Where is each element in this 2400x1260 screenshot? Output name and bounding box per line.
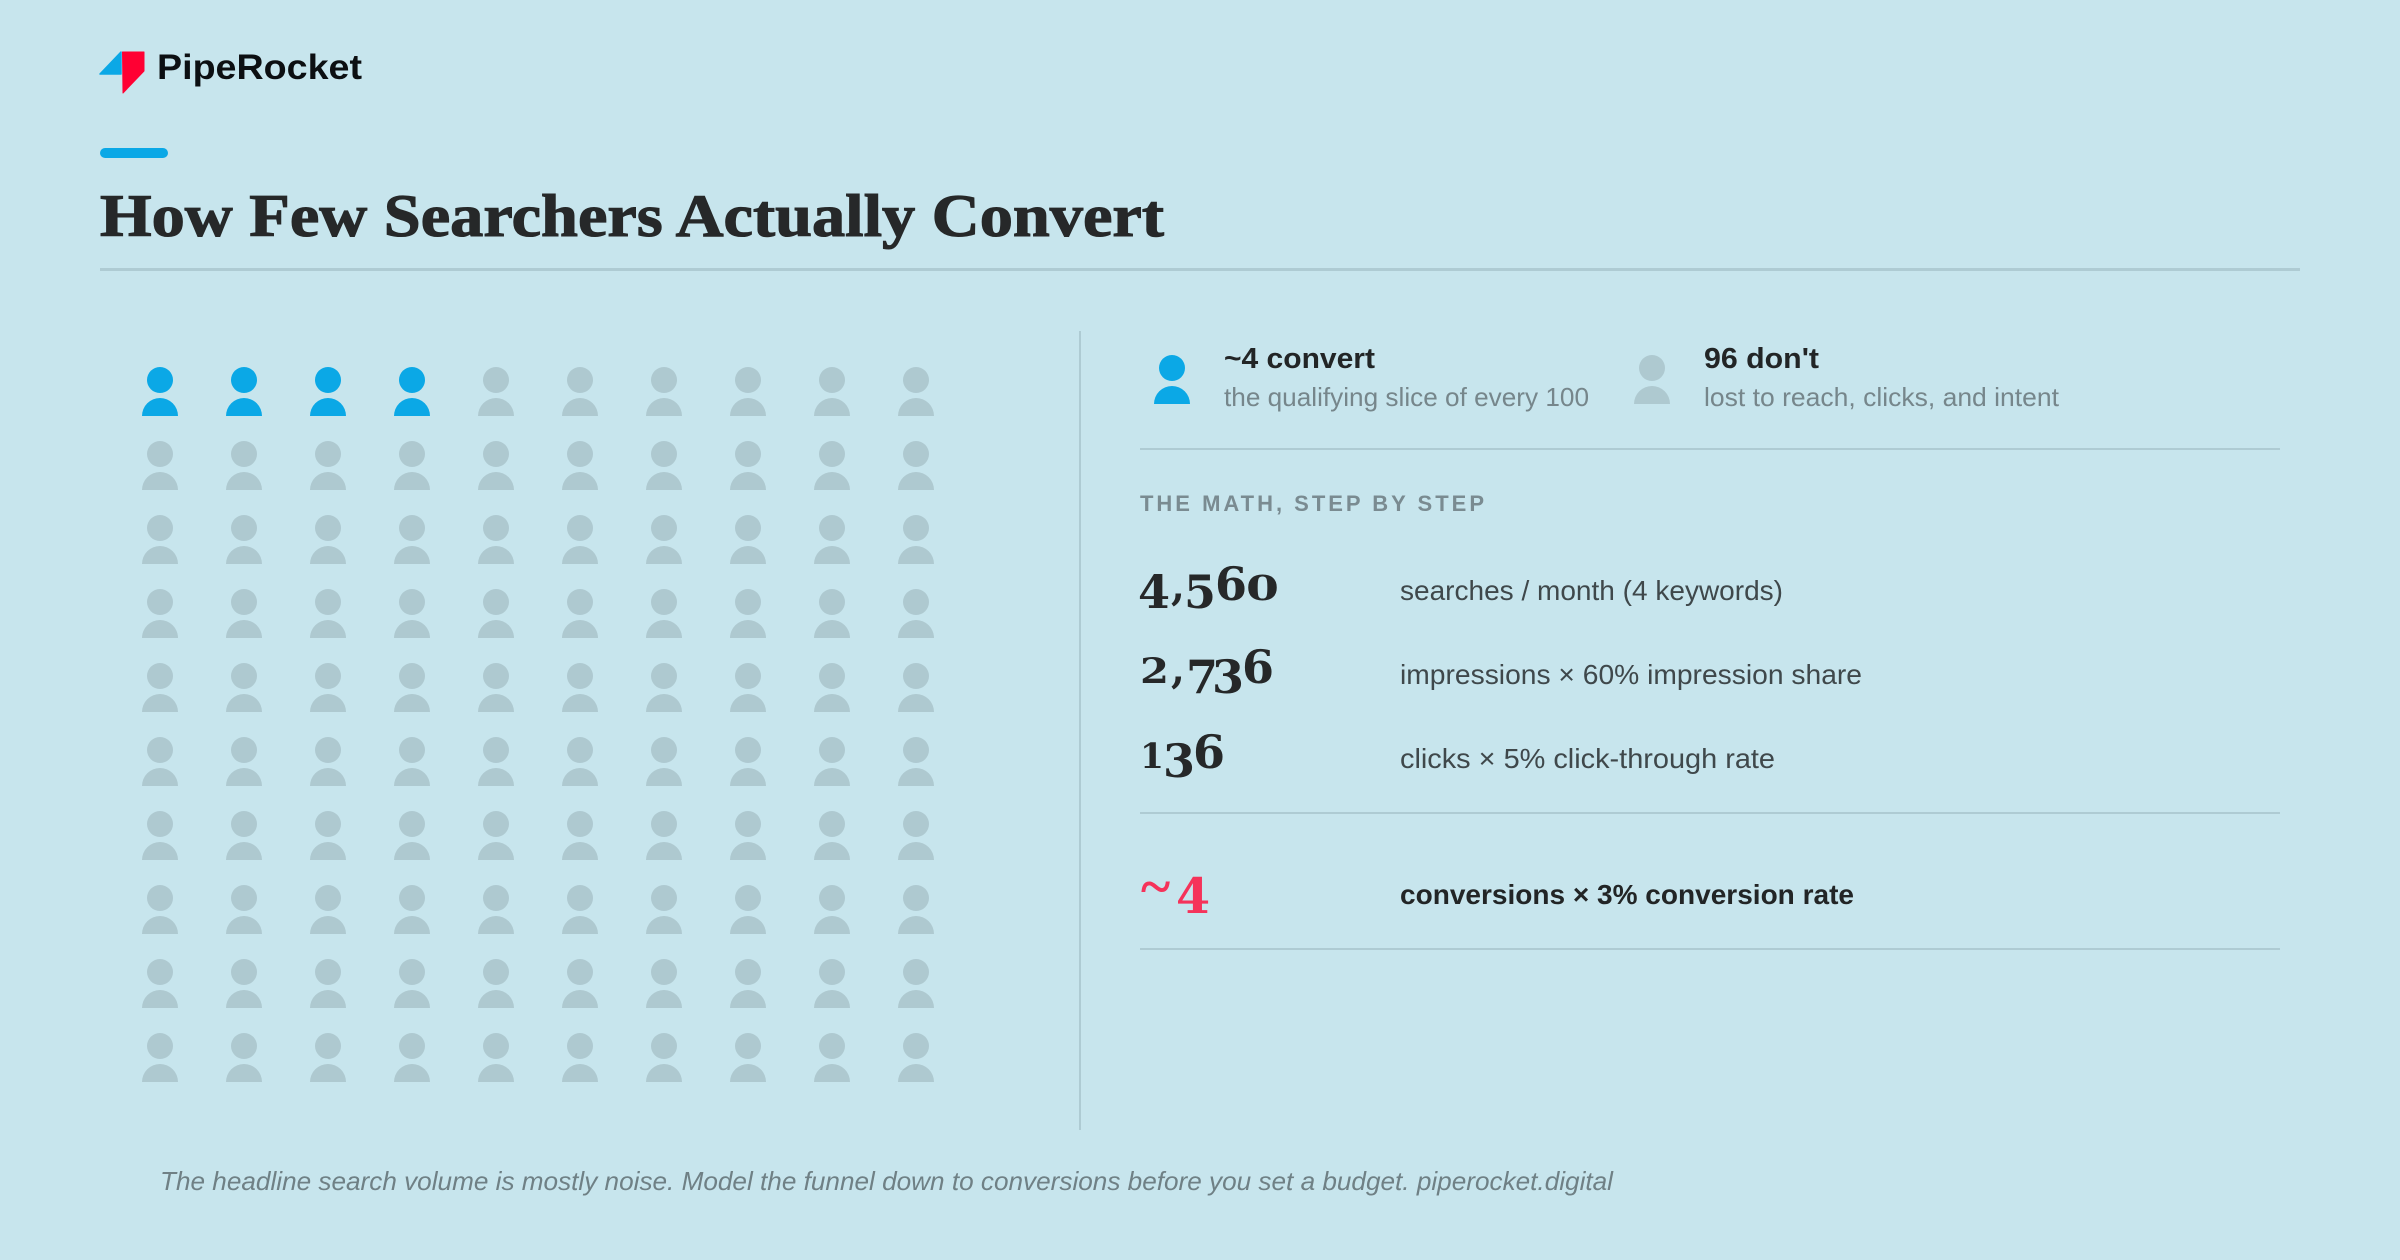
number: ~4: 4 xyxy=(1176,867,1210,925)
number: 2,736: 2 xyxy=(1140,651,1169,692)
number: 136: 3 xyxy=(1163,734,1195,788)
label: impressions: impressions × 60% impression share xyxy=(1400,659,1862,690)
label: conversions: conversions × 3% conversion rate xyxy=(1400,879,1854,910)
number: 136: 1 xyxy=(1140,736,1164,777)
title: How Few Searchers Actually Convert xyxy=(100,183,1164,249)
number: 4,560: 4 xyxy=(1138,565,1170,619)
number: 136: 6 xyxy=(1193,725,1225,779)
panel: funnel math steps xyxy=(1138,557,2280,950)
icon: grey person xyxy=(1634,355,1670,404)
section heading: the math: THE MATH, STEP BY STEP xyxy=(1140,491,1484,516)
number: 4,560: , xyxy=(1171,563,1185,610)
legend item: non-converters xyxy=(1634,343,2060,412)
step: impressions xyxy=(1140,640,1862,704)
footer note: The headline search volume is mostly noise. Model the funnel down to conversions before you set a budget. piperocket.digital xyxy=(160,1166,1614,1196)
converting people: 4 blue icons xyxy=(142,367,430,416)
step: searches xyxy=(1138,557,1783,619)
icon: blue person xyxy=(1154,355,1190,404)
legend description: non-converters: lost to reach, clicks, and intent xyxy=(1704,382,2060,412)
number: 2,736: 3 xyxy=(1212,650,1244,704)
icon: logo mark xyxy=(100,52,144,93)
panel: waffle chart of 100 people xyxy=(142,367,934,1082)
legend heading: non-converters: 96 don't xyxy=(1704,343,1819,375)
number: 4,560: 5 xyxy=(1184,565,1216,619)
number: 2,736: 6 xyxy=(1242,640,1274,694)
panel: legend xyxy=(1154,343,2060,412)
legend heading: converters: ~4 convert xyxy=(1224,343,1375,375)
logo: PipeRocket xyxy=(100,48,362,93)
legend item: converters xyxy=(1154,343,1589,412)
step: conversions xyxy=(1141,856,1854,925)
number: 4,560: 0 xyxy=(1246,568,1279,609)
number: 2,736: 7 xyxy=(1186,650,1218,704)
non-converting people: 96 grey icons xyxy=(142,367,934,1082)
step: clicks xyxy=(1140,725,1775,788)
number: 4,560: 6 xyxy=(1215,557,1247,611)
logo wordmark: PipeRocket xyxy=(157,48,362,87)
legend description: converters: the qualifying slice of every 100 xyxy=(1224,382,1589,412)
label: searches: searches / month (4 keywords) xyxy=(1400,575,1783,606)
label: clicks: clicks × 5% click-through rate xyxy=(1400,743,1775,774)
number: 2,736: , xyxy=(1171,646,1185,693)
accent bar xyxy=(100,148,168,158)
number: ~4: ~ xyxy=(1141,856,1170,918)
